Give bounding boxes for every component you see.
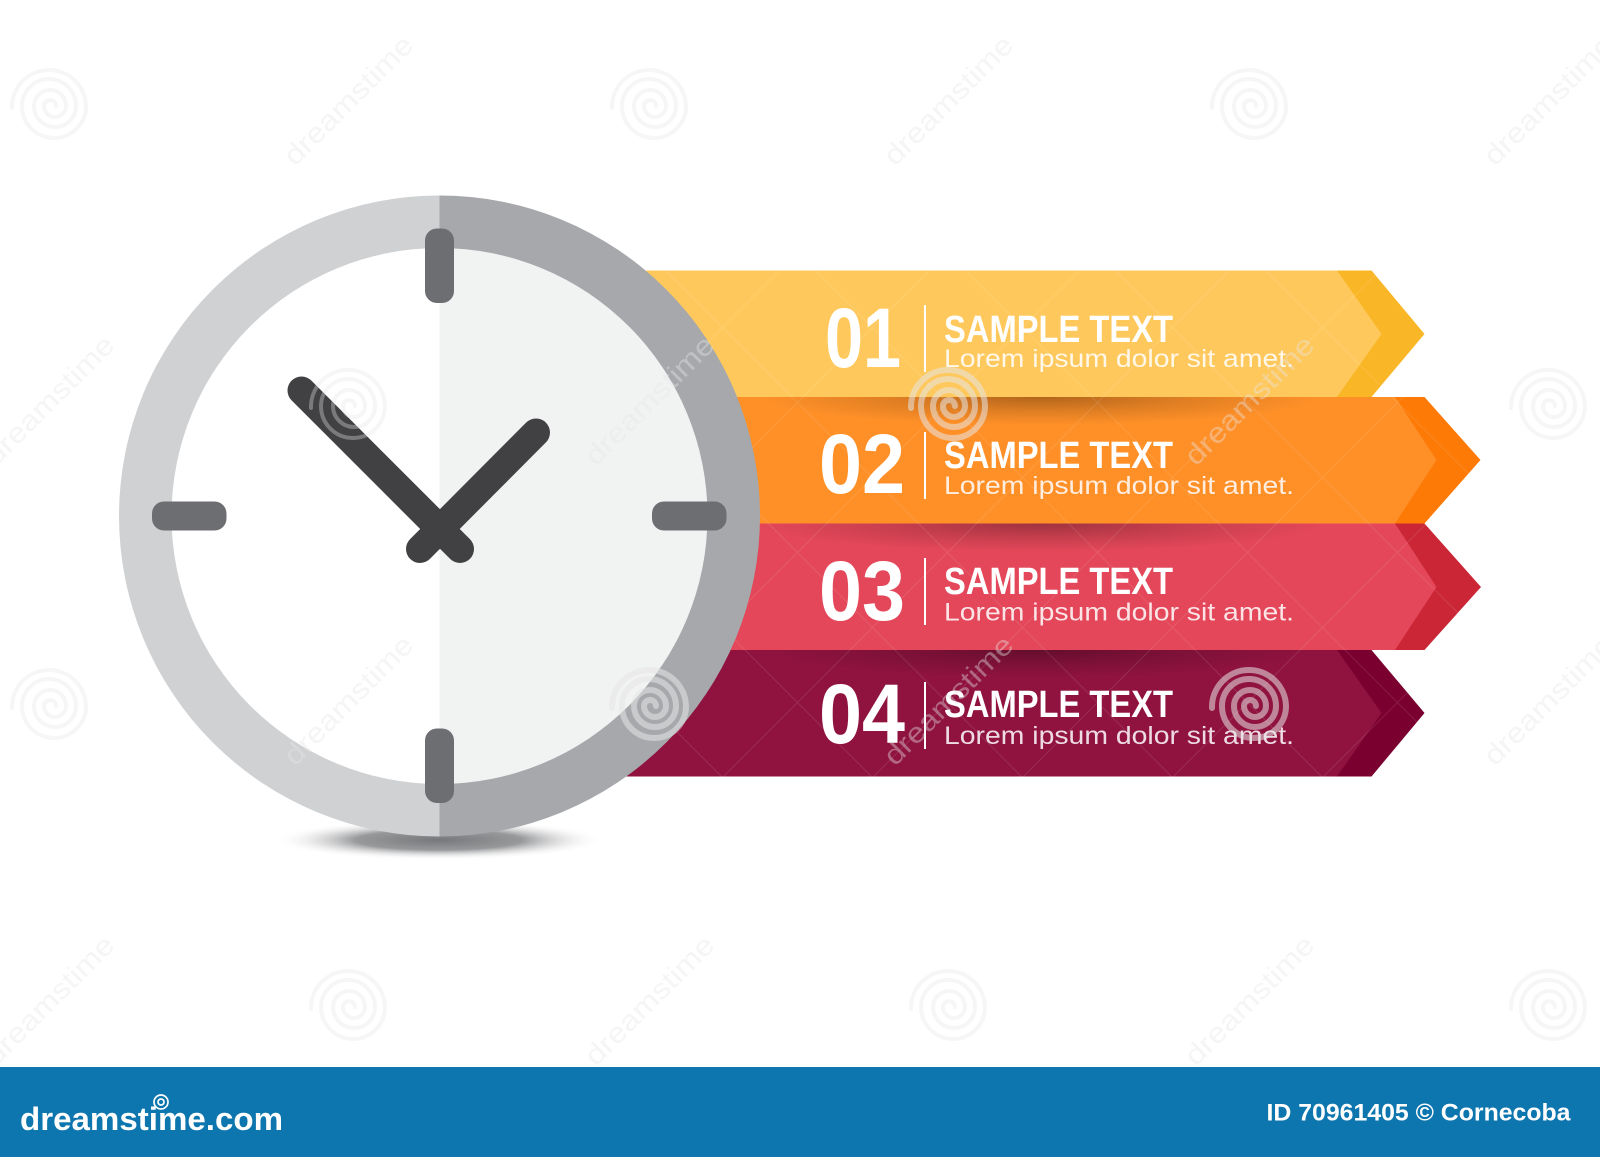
watermark: diagonal text: dreamstime [877, 29, 1019, 171]
watermark: diagonal text: dreamstime [578, 329, 720, 471]
watermark: diagonal text: dreamstime [578, 929, 720, 1071]
footer logo spiral [154, 1095, 168, 1109]
panel: arrow bar 02 [500, 397, 1480, 524]
bar 04 top shadow [760, 650, 1320, 706]
clock rim right half [440, 196, 760, 836]
panel: arrow bar 01 [500, 270, 1424, 397]
bar 01 number: 01 [825, 291, 901, 385]
bar 03 top shadow [760, 524, 1320, 580]
bar 02 number: 02 [819, 417, 905, 511]
bar 02 divider [924, 432, 926, 499]
clock ground shadow [273, 820, 605, 860]
bar 02 top shadow [760, 397, 1320, 453]
bar 03 heading: SAMPLE TEXT [944, 561, 1173, 603]
panel: arrow bar 04 [500, 650, 1424, 776]
bar 03 divider [924, 558, 926, 625]
bar 03 body text: Lorem ipsum dolor sit amet. [944, 598, 1294, 626]
watermark: diagonal text: dreamstime [1178, 329, 1320, 471]
bar 04 number: 04 [819, 667, 905, 761]
footer bar [0, 1067, 1600, 1157]
bar 01 divider [924, 305, 926, 372]
watermark: diagonal text: dreamstime [277, 29, 419, 171]
bar 04 body text: Lorem ipsum dolor sit amet. [944, 722, 1294, 750]
footer image id and credit: ID 70961405 © Cornecoba [1266, 1100, 1571, 1126]
watermark: strong spirals [612, 370, 1286, 738]
clock face right half [440, 248, 708, 784]
watermark: diagonal text: dreamstime [277, 629, 419, 771]
clock hands [302, 390, 536, 549]
bar 01 heading: SAMPLE TEXT [944, 309, 1173, 351]
icon: clock [119, 196, 760, 836]
bar 02 body text: Lorem ipsum dolor sit amet. [944, 472, 1294, 500]
clock face left half [172, 248, 440, 784]
footer logo text: dreamstime.com [20, 1101, 283, 1137]
bar 04 divider [924, 682, 926, 749]
bar 04 heading: SAMPLE TEXT [944, 684, 1173, 726]
watermark: diagonal text: dreamstime [1477, 29, 1600, 171]
hour ticks [152, 228, 726, 803]
bar 03 number: 03 [819, 544, 905, 638]
panel: arrow bar 03 [500, 524, 1481, 650]
bar 02 heading: SAMPLE TEXT [944, 435, 1173, 477]
clock rim left half [119, 196, 440, 836]
watermark: diagonal text: dreamstime [877, 629, 1019, 771]
bar 01 body text: Lorem ipsum dolor sit amet. [944, 345, 1294, 373]
watermark: diagonal text: dreamstime [1178, 929, 1320, 1071]
watermark: diagonal text: dreamstime [1477, 629, 1600, 771]
